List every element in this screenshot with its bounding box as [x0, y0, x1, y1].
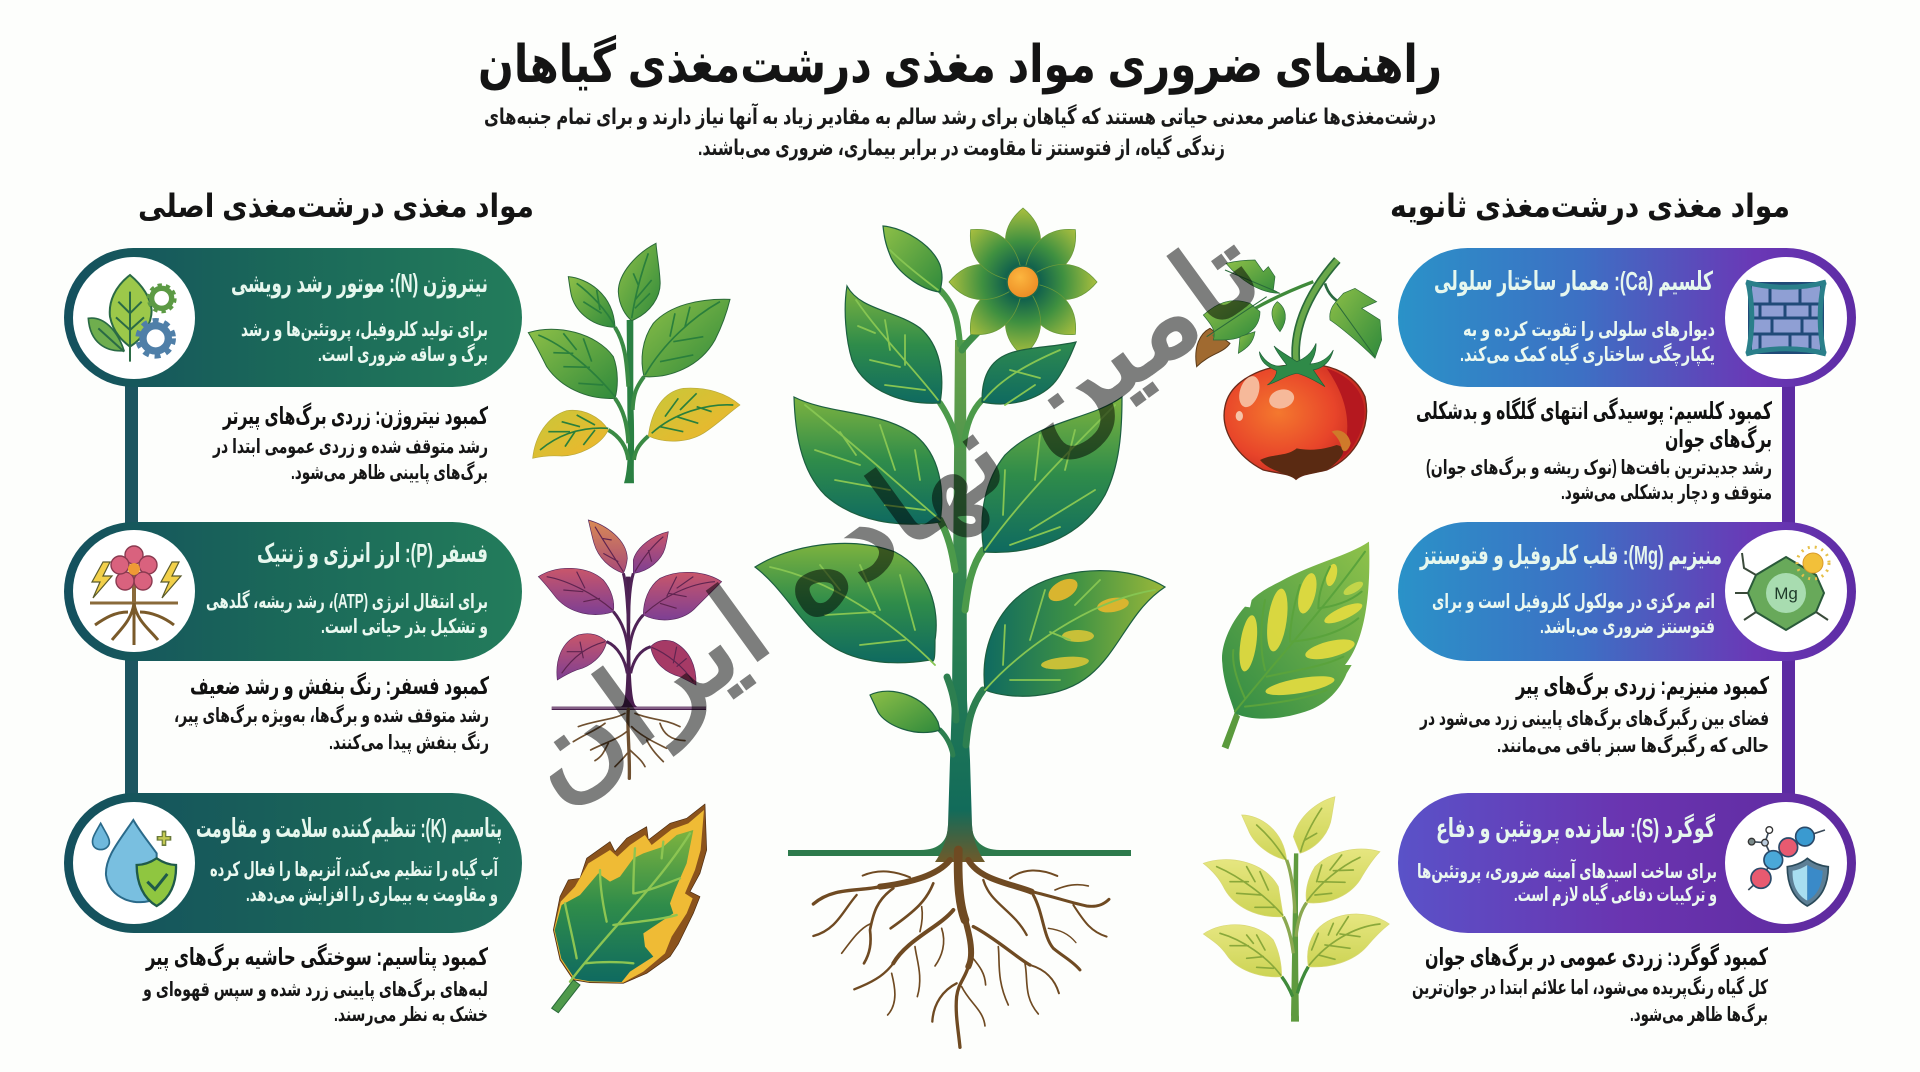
intro paragraph: زندگی گیاه، از فتوسنتز تا مقاومت در برابر بیماری، ضروری می‌باشند. — [698, 134, 1225, 161]
panel: calcium: یکپارچگی ساختاری گیاه کمک می‌کند. — [1460, 342, 1715, 367]
text: phosphorus deficiency: رشد متوقف شده و برگ‌ها، به‌ویژه برگ‌های پیر، — [174, 704, 489, 728]
icon: flower, lightning and roots — [90, 546, 181, 645]
panel: nitrogen: نیتروژن (N): موتور رشد رویشی — [231, 268, 488, 299]
leaf veins — [770, 250, 1155, 690]
text: potassium deficiency: کمبود پتاسیم: سوختگی حاشیه برگ‌های پیر — [145, 943, 488, 971]
icon: leaf and gears — [88, 275, 175, 362]
leaf spots — [1041, 574, 1130, 671]
panel: nitrogen — [64, 248, 522, 387]
central leaves — [755, 226, 1165, 732]
text: sulfur deficiency — [1412, 943, 1768, 1026]
heading: primary macronutrients: مواد مغذی درشت‌مغذی اصلی — [138, 188, 534, 225]
flower — [949, 208, 1097, 356]
text: nitrogen deficiency — [212, 402, 488, 485]
text: nitrogen deficiency: برگ‌های پایینی ظاهر می‌شود. — [291, 461, 488, 485]
panel: phosphorus: و تشکیل بذر حیاتی است. — [321, 616, 488, 638]
icon: chlorophyll molecule — [1735, 547, 1829, 630]
roots — [813, 850, 1109, 1047]
panel: sulfur — [1398, 793, 1856, 933]
central plant — [755, 208, 1165, 862]
intro paragraph — [484, 102, 1436, 161]
plant: nitrogen deficiency with yellow lower leaves — [528, 243, 740, 483]
icon: amino acid chain and shield — [1748, 827, 1828, 906]
text: magnesium deficiency: کمبود منیزیم: زردی برگ‌های پیر — [1515, 672, 1769, 700]
panel: phosphorus: برای انتقال انرژی (ATP)، رشد ریشه، گلدهی — [206, 589, 488, 613]
text: calcium deficiency — [1416, 397, 1772, 505]
text: nitrogen deficiency: رشد متوقف شده و زردی عمومی ابتدا در — [212, 436, 488, 458]
text: phosphorus deficiency: کمبود فسفر: رنگ بنفش و رشد ضعیف — [190, 672, 489, 700]
panel: phosphorus: فسفر (P): ارز انرژی و ژنتیک — [257, 538, 488, 569]
panel: potassium: و مقاومت به بیماری را افزایش می‌دهد. — [246, 884, 498, 906]
right connector line — [1782, 380, 1795, 800]
icon: water drops and shield — [92, 820, 176, 906]
title: راهنمای ضروری مواد مغذی درشت‌مغذی گیاهان — [478, 34, 1442, 95]
icon: brick cell wall — [1746, 282, 1826, 354]
panel: calcium: دیوارهای سلولی را تقویت کرده و به — [1463, 319, 1715, 341]
text: magnesium deficiency: حالی که رگبرگ‌ها سبز باقی می‌مانند. — [1497, 733, 1769, 757]
panel: magnesium: فتوسنتز ضروری می‌باشد. — [1540, 616, 1715, 638]
text: calcium deficiency: رشد جدیدترین بافت‌ها (نوک ریشه و برگ‌های جوان) — [1426, 456, 1772, 479]
panel: magnesium: اتم مرکزی در مولکول کلروفیل است و برای — [1432, 591, 1715, 613]
plant: sulfur deficiency, pale yellow — [1203, 797, 1389, 1022]
panel: nitrogen: برای تولید کلروفیل، پروتئین‌ها و رشد — [241, 319, 488, 342]
heading: secondary macronutrients: مواد مغذی درشت‌مغذی ثانویه — [1390, 188, 1790, 225]
text: magnesium deficiency — [1419, 672, 1769, 757]
panel: phosphorus — [64, 522, 522, 661]
left connector line — [125, 380, 138, 800]
text: calcium deficiency: برگ‌های جوان — [1665, 425, 1772, 453]
text: phosphorus deficiency — [174, 672, 489, 755]
tomato with blossom end rot — [1196, 260, 1382, 479]
intro paragraph: درشت‌مغذی‌ها عناصر معدنی حیاتی هستند که گیاهان برای رشد سالم به مقادیر زیاد به آنها نیاز دارند و برای تمام جنبه‌های — [484, 102, 1436, 130]
panel: nitrogen: برگ و ساقه ضروری است. — [318, 343, 488, 366]
text: phosphorus deficiency: رنگ بنفش پیدا می‌کنند. — [329, 730, 489, 755]
text: nitrogen deficiency: کمبود نیتروژن: زردی برگ‌های پیرتر — [222, 402, 488, 430]
plant: phosphorus deficiency, purple with roots — [538, 520, 722, 778]
text: potassium deficiency: لبه‌های برگ‌های پایینی زرد شده و سپس قهوه‌ای و — [142, 978, 488, 1002]
panel: potassium: پتاسیم (K): تنظیم‌کننده سلامت و مقاومت — [196, 813, 502, 844]
panel: potassium: آب گیاه را تنظیم می‌کند، آنزیم‌ها را فعال کرده — [210, 856, 499, 881]
text: magnesium deficiency: فضای بین رگبرگ‌های برگ‌های پایینی زرد می‌شود در — [1419, 706, 1769, 731]
text: potassium deficiency: خشک به نظر می‌رسند. — [334, 1004, 488, 1026]
panel: sulfur: گوگرد (S): سازنده پروتئین و دفاع — [1436, 813, 1716, 844]
icon: chlorophyll molecule: Mg — [1774, 584, 1798, 603]
panel: calcium — [1398, 248, 1856, 387]
text: calcium deficiency: متوقف و دچار بدشکلی می‌شود. — [1561, 482, 1772, 505]
panel: magnesium: منیزیم (Mg): قلب کلروفیل و فتوسنتز — [1419, 540, 1722, 571]
text: potassium deficiency — [142, 943, 488, 1026]
panel: potassium — [64, 793, 522, 933]
watermark: تامین نهاده ایران — [498, 207, 1286, 828]
panel: magnesium — [1398, 522, 1856, 661]
leaf: magnesium interveinal chlorosis — [1222, 542, 1369, 749]
panel: sulfur: و ترکیبات دفاعی گیاه لازم است. — [1514, 882, 1717, 906]
panel: calcium: کلسیم (Ca): معمار ساختار سلولی — [1434, 266, 1714, 297]
text: sulfur deficiency: برگ‌ها ظاهر می‌شود. — [1630, 1003, 1768, 1026]
panel: sulfur: برای ساخت اسیدهای آمینه ضروری، پروتئین‌ها — [1417, 858, 1717, 884]
leaf: potassium burnt margin — [552, 804, 707, 1013]
